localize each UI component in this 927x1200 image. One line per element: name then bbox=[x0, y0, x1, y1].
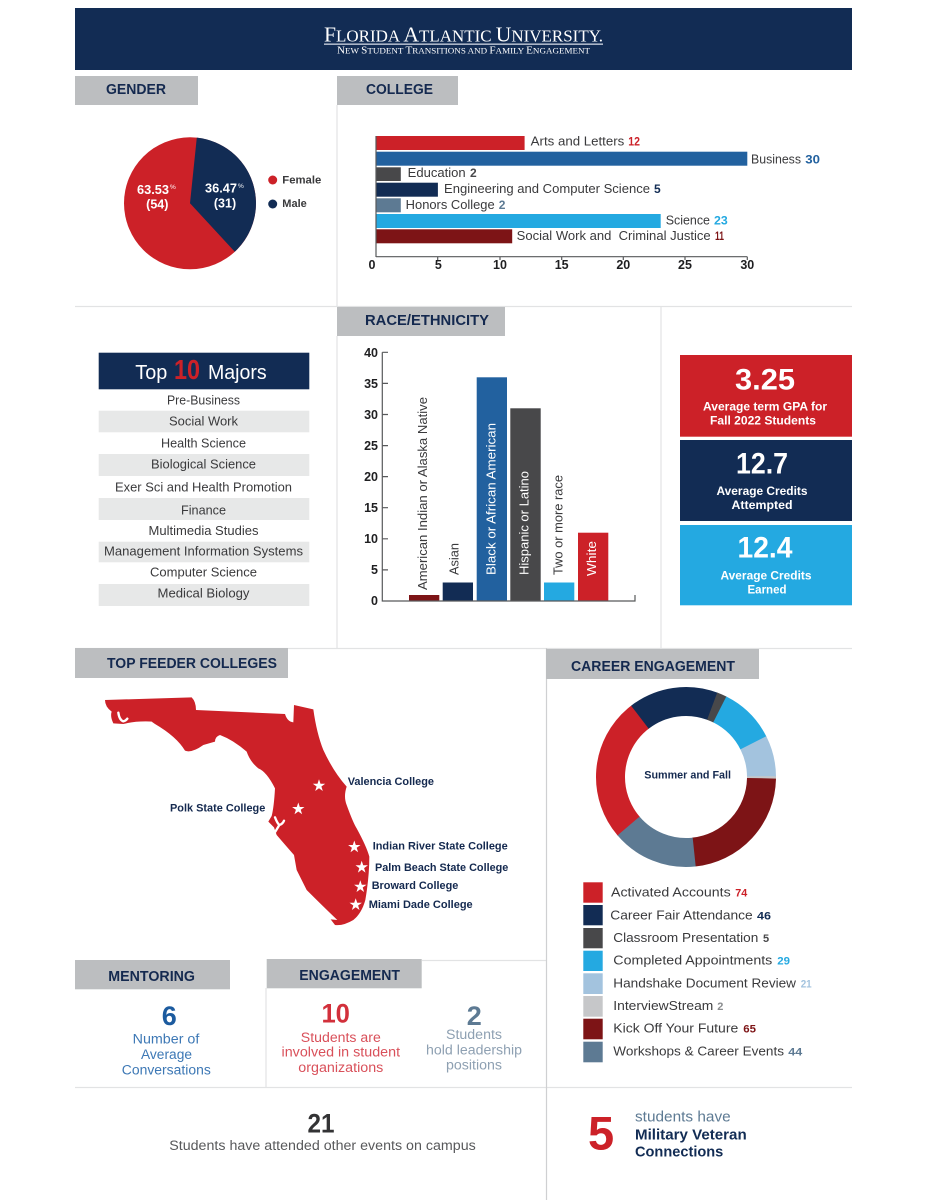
stat: campus events: 21 bbox=[308, 1109, 334, 1139]
majors title: Majors bbox=[208, 362, 267, 384]
bar chart: race/ethnicity: Asian bbox=[447, 543, 462, 575]
stat: average GPA: Average term GPA for bbox=[703, 400, 827, 414]
pie chart: gender: % bbox=[238, 183, 244, 190]
majors title bbox=[99, 353, 309, 389]
stat: mentoring conversations: Conversations bbox=[122, 1062, 211, 1077]
majors title: 10 bbox=[174, 354, 200, 385]
bar chart: college: 20 bbox=[616, 258, 630, 272]
heading: gender bbox=[75, 76, 198, 105]
panel: top 10 majors: Medical Biology bbox=[158, 585, 250, 600]
header banner bbox=[75, 8, 852, 70]
stat: credits attempted: Average Credits bbox=[716, 484, 808, 498]
heading: top feeder colleges: TOP FEEDER COLLEGES bbox=[107, 656, 277, 672]
legend: gender: Female bbox=[282, 174, 321, 186]
heading: top feeder colleges bbox=[75, 648, 288, 678]
stat: campus events bbox=[169, 1109, 476, 1153]
bar chart: race/ethnicity: 20 bbox=[364, 470, 378, 484]
panel: top 10 majors: Exer Sci and Health Promotion bbox=[115, 479, 292, 494]
heading: college bbox=[337, 76, 458, 105]
legend: career engagement: Completed Appointments bbox=[613, 953, 772, 968]
legend: gender: Male bbox=[282, 198, 307, 210]
stat: student organizations: organizations bbox=[298, 1060, 384, 1075]
bar chart: college: 5 bbox=[654, 182, 661, 196]
map stars bbox=[292, 779, 368, 910]
bar chart: race/ethnicity bbox=[364, 346, 635, 608]
bar chart: race/ethnicity: 15 bbox=[364, 501, 378, 515]
stat: leadership positions: 2 bbox=[467, 1001, 482, 1031]
pie chart: gender: 63.53 bbox=[137, 183, 169, 197]
panel: top 10 majors: Finance bbox=[181, 503, 226, 518]
bar chart: race/ethnicity: 0 bbox=[371, 594, 378, 608]
bar chart: race/ethnicity: White bbox=[584, 541, 599, 576]
stat: military veteran connections: Military Veteran bbox=[635, 1126, 747, 1143]
stat: leadership positions: hold leadership bbox=[426, 1042, 522, 1057]
stat: mentoring conversations: Average bbox=[141, 1047, 192, 1062]
bar chart: race/ethnicity: 40 bbox=[364, 346, 378, 360]
panel: top 10 majors: Management Information Systems bbox=[104, 544, 303, 559]
heading: career engagement: CAREER ENGAGEMENT bbox=[571, 659, 735, 675]
bar chart: college: Arts and Letters bbox=[531, 134, 624, 149]
heading: mentoring: MENTORING bbox=[108, 969, 195, 985]
bar chart: college: 10 bbox=[493, 258, 507, 272]
map labels: Indian River State College bbox=[373, 840, 508, 852]
panel: top 10 majors: Multimedia Studies bbox=[148, 523, 258, 538]
heading: race/ethnicity bbox=[337, 307, 505, 336]
stat: mentoring conversations bbox=[122, 1001, 211, 1077]
heading: engagement: ENGAGEMENT bbox=[299, 968, 400, 984]
legend: career engagement: 44 bbox=[788, 1047, 803, 1059]
bar chart: college: 11 bbox=[715, 229, 724, 243]
bar chart: college bbox=[369, 134, 820, 272]
stat: credits attempted bbox=[680, 440, 852, 521]
stat: credits earned: Earned bbox=[748, 582, 786, 596]
bar chart: college: Science bbox=[666, 213, 710, 228]
legend: career engagement: 21 bbox=[801, 978, 812, 990]
bar chart: race/ethnicity: 10 bbox=[364, 532, 378, 546]
stat: campus events: Students have attended other events on campus bbox=[169, 1138, 476, 1153]
legend: career engagement: Kick Off Your Future bbox=[613, 1021, 738, 1036]
stat: military veteran connections: 5 bbox=[588, 1106, 614, 1159]
map labels: Polk State College bbox=[170, 803, 265, 815]
bar chart: college: 5 bbox=[435, 258, 442, 272]
bar chart: race/ethnicity: Black or African American bbox=[484, 423, 499, 575]
legend: career engagement: 5 bbox=[763, 933, 769, 945]
bar chart: college: 2 bbox=[499, 198, 506, 212]
heading: engagement bbox=[267, 959, 422, 988]
heading: race/ethnicity: RACE/ETHNICITY bbox=[365, 313, 489, 329]
stat: leadership positions: Students bbox=[446, 1027, 502, 1042]
bar chart: college: Business bbox=[751, 151, 801, 166]
bar chart: race/ethnicity: Hispanic or Latino bbox=[516, 471, 531, 575]
pie chart: gender: % bbox=[170, 184, 176, 191]
heading: college: COLLEGE bbox=[366, 82, 433, 98]
panel: top 10 majors: Social Work bbox=[169, 414, 239, 429]
bar chart: college: 12 bbox=[628, 135, 640, 149]
stat: credits attempted: 12.7 bbox=[736, 447, 788, 480]
legend: career engagement: 29 bbox=[777, 956, 790, 968]
stat: military veteran connections bbox=[588, 1106, 747, 1161]
map labels: Broward College bbox=[372, 880, 458, 892]
stat: mentoring conversations: Number of bbox=[133, 1031, 200, 1046]
bar chart: college: 2 bbox=[470, 166, 477, 180]
bar chart: college: 30 bbox=[740, 258, 754, 272]
legend: career engagement bbox=[583, 882, 812, 1062]
panel: top 10 majors bbox=[99, 353, 309, 606]
bar chart: race/ethnicity: Two or more race bbox=[550, 475, 565, 575]
bar chart: college: 15 bbox=[555, 258, 569, 272]
bar chart: college: Social Work and Criminal Justice bbox=[517, 228, 711, 243]
legend: career engagement: 65 bbox=[743, 1024, 756, 1036]
legend: career engagement: 74 bbox=[735, 888, 748, 900]
bar chart: college: Engineering and Computer Science bbox=[444, 181, 650, 196]
bar chart: college: 23 bbox=[714, 214, 728, 228]
map: Florida bbox=[105, 697, 369, 925]
stat: student organizations: Students are bbox=[301, 1030, 381, 1045]
pie chart: gender: (54) bbox=[146, 197, 168, 211]
legend: career engagement: Classroom Presentation bbox=[613, 930, 758, 945]
stat: student organizations: involved in student bbox=[282, 1045, 400, 1060]
legend: career engagement: Activated Accounts bbox=[611, 885, 731, 900]
heading: mentoring bbox=[75, 960, 230, 989]
bar chart: race/ethnicity: 30 bbox=[364, 408, 378, 422]
map labels: Palm Beach State College bbox=[375, 862, 508, 874]
stat: average GPA: Fall 2022 Students bbox=[710, 413, 816, 427]
stat: student organizations: 10 bbox=[321, 999, 350, 1029]
legend: career engagement: 2 bbox=[717, 1001, 723, 1013]
bar chart: college: Education bbox=[408, 165, 466, 180]
legend: career engagement: Workshops & Career Events bbox=[613, 1044, 784, 1059]
donut chart: career engagement: Summer and Fall bbox=[644, 769, 731, 781]
map labels: Valencia College bbox=[348, 776, 434, 788]
stat: student organizations bbox=[282, 999, 400, 1075]
donut chart: career engagement bbox=[580, 671, 792, 883]
map labels: Miami Dade College bbox=[369, 899, 473, 911]
legend: career engagement: 46 bbox=[757, 910, 771, 922]
panel: top 10 majors: Health Science bbox=[161, 435, 246, 450]
heading: gender: GENDER bbox=[106, 82, 167, 98]
bar chart: race/ethnicity: 5 bbox=[371, 563, 378, 577]
university name: FLORIDA ATLANTIC UNIVERSITY. bbox=[324, 22, 603, 46]
legend: career engagement: InterviewStream bbox=[613, 998, 713, 1013]
panel: top 10 majors: Computer Science bbox=[150, 565, 257, 580]
legend: gender bbox=[268, 174, 321, 210]
stat: credits earned: 12.4 bbox=[738, 531, 793, 564]
panel: top 10 majors: Biological Science bbox=[151, 457, 256, 472]
stat: military veteran connections: students have bbox=[635, 1109, 731, 1126]
bar chart: college: 30 bbox=[805, 152, 820, 166]
stat: average GPA bbox=[680, 355, 852, 437]
majors title: Top bbox=[135, 362, 167, 384]
stat: leadership positions: positions bbox=[446, 1057, 502, 1072]
department name: NEW STUDENT TRANSITIONS AND FAMILY ENGAGEMENT bbox=[337, 46, 591, 56]
pie chart: gender bbox=[124, 137, 256, 269]
bar chart: race/ethnicity: 25 bbox=[364, 439, 378, 453]
pie chart: gender: 36.47 bbox=[205, 182, 237, 196]
map labels bbox=[170, 776, 508, 911]
legend: career engagement: Career Fair Attendance bbox=[610, 907, 753, 922]
stat: military veteran connections: Connections bbox=[635, 1144, 723, 1161]
bar chart: college: 25 bbox=[678, 258, 692, 272]
stat: average GPA: 3.25 bbox=[735, 363, 795, 396]
bar chart: college: Honors College bbox=[406, 197, 495, 212]
bar chart: race/ethnicity: American Indian or Alaska Native bbox=[415, 397, 430, 590]
stat: leadership positions bbox=[426, 1001, 522, 1072]
panel: top 10 majors: Pre-Business bbox=[167, 392, 240, 407]
pie chart: gender: (31) bbox=[214, 196, 236, 210]
stat: credits earned bbox=[680, 525, 852, 605]
stat: credits earned: Average Credits bbox=[720, 568, 812, 582]
heading: career engagement bbox=[546, 649, 759, 679]
stat: mentoring conversations: 6 bbox=[162, 1001, 177, 1031]
legend: career engagement: Handshake Document Review bbox=[613, 975, 797, 990]
bar chart: college: 0 bbox=[369, 258, 376, 272]
bar chart: race/ethnicity: 35 bbox=[364, 377, 378, 391]
stat: credits attempted: Attempted bbox=[732, 498, 792, 512]
